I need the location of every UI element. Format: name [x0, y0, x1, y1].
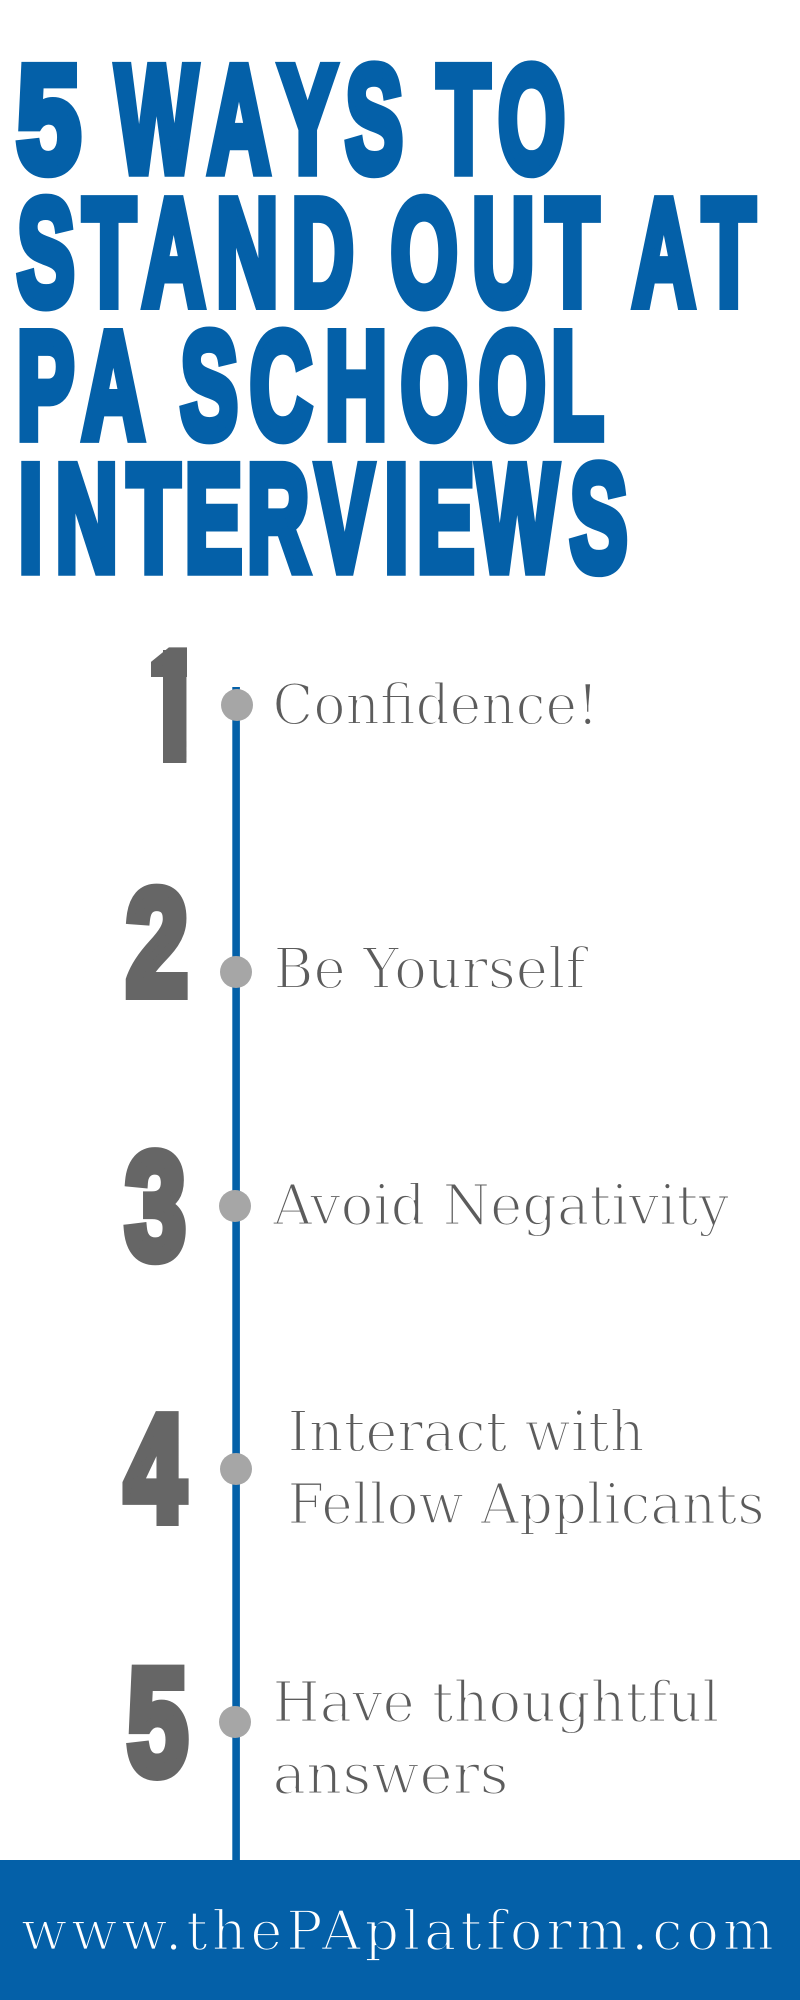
label 4 line 1: Interact with — [288, 1400, 644, 1465]
label 5 line 1: Have thoughtful — [272, 1671, 720, 1736]
footer background — [0, 1860, 800, 2000]
step 5: have thoughtful answers — [127, 1637, 719, 1807]
step 3: avoid negativity — [125, 1121, 729, 1290]
dot 1 — [221, 689, 253, 721]
step 1: confidence — [151, 647, 590, 763]
number 5: 5 — [127, 1637, 188, 1806]
step 2: be yourself — [126, 859, 590, 1027]
label 2: Be Yourself — [274, 937, 590, 1002]
label 3: Avoid Negativity — [272, 1173, 729, 1238]
title numeral 5: 5 — [17, 36, 81, 204]
label 1: Confidence! — [272, 673, 598, 738]
title line 1 words: WAYS TO — [116, 36, 565, 204]
title line 2: STAND OUT AT — [17, 169, 755, 338]
number 4: 4 — [125, 1384, 185, 1553]
label 5 line 2: answers — [272, 1742, 508, 1807]
title line 3: PA SCHOOL — [17, 302, 604, 471]
label 4 — [288, 1400, 764, 1537]
label 4 line 2: Fellow Applicants — [288, 1472, 764, 1537]
footer band — [0, 1860, 800, 2000]
footer url: www.thePAplatform.com — [21, 1899, 774, 1962]
step 4: interact with fellow applicants — [125, 1384, 764, 1553]
dot 5 — [219, 1706, 251, 1738]
title line 4: INTERVIEWS — [19, 435, 627, 603]
title line 1 — [17, 36, 565, 204]
dot 3 — [219, 1190, 251, 1222]
label 5 — [272, 1671, 720, 1807]
title — [17, 36, 755, 603]
dot 2 — [220, 956, 252, 988]
number 2: 2 — [126, 859, 188, 1027]
number 3: 3 — [125, 1121, 186, 1290]
number 1: 1 — [141, 620, 208, 789]
number 1 — [151, 647, 187, 763]
timeline vertical line — [232, 687, 240, 1862]
dot 4 — [220, 1453, 252, 1485]
